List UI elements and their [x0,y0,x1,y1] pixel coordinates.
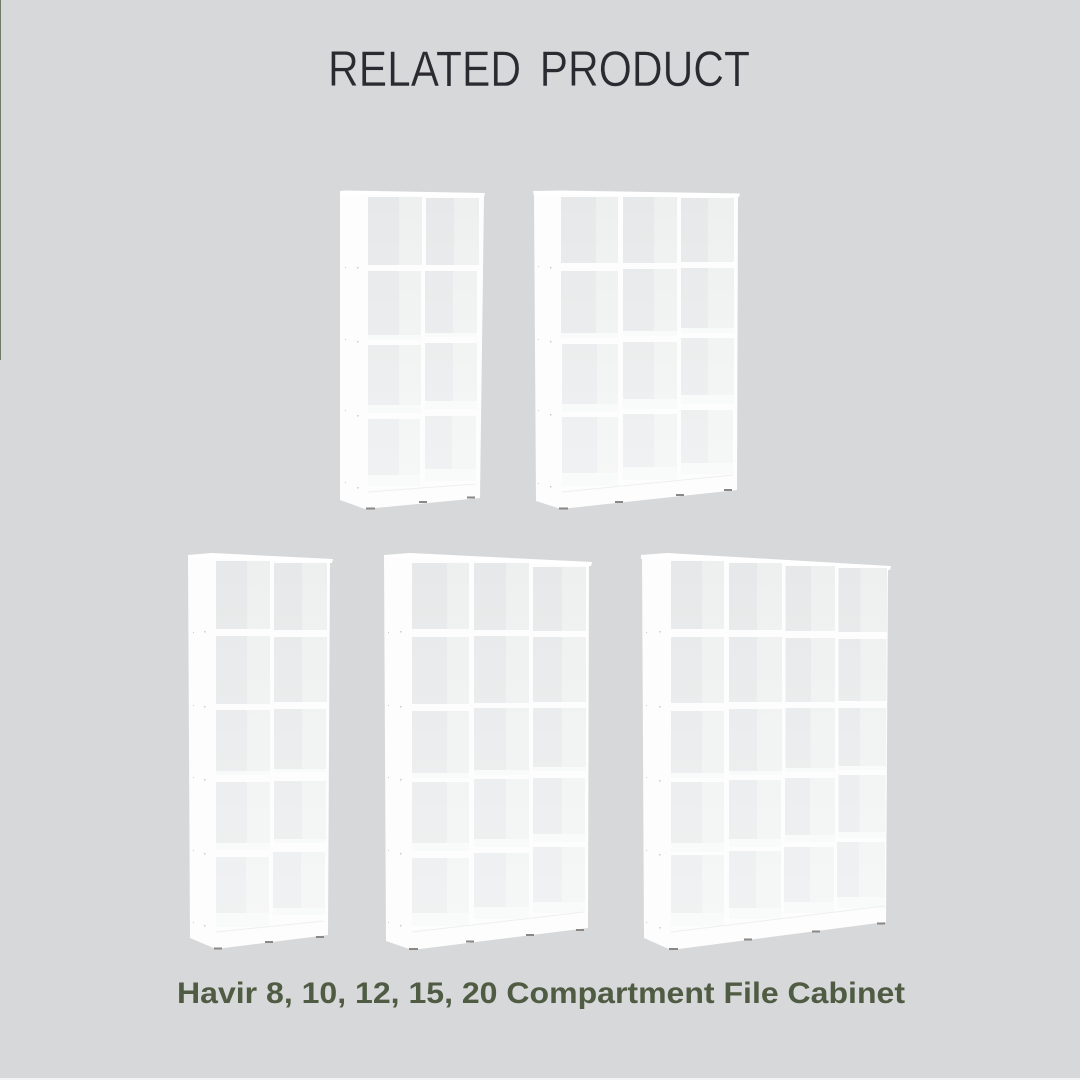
compartments [671,561,887,926]
compartments [561,197,734,486]
assembly holes [345,267,358,488]
plinth line [412,912,584,932]
plinth line [368,484,476,492]
cabinet: 8 compartment [340,190,485,510]
top panel [533,190,740,197]
feet [669,922,885,950]
assembly holes [646,631,660,928]
compartments [216,561,327,927]
cabinet frame [642,556,888,950]
cabinet frame [534,193,738,509]
top panel [340,190,485,197]
assembly holes [388,631,402,926]
cabinet frame [188,556,330,949]
cabinet: 12 compartment [533,190,740,510]
title: RELATED PRODUCT [328,41,750,97]
plinth line [216,921,324,932]
cabinet: 20 compartment [641,553,891,950]
compartments [368,197,479,486]
assembly holes [193,631,206,926]
compartments [412,563,586,926]
cabinet: 15 compartment [384,553,592,950]
top panel [641,553,891,570]
top panel [188,553,333,563]
feet [559,489,732,510]
caption: Havir 8, 10, 12, 15, 20 Compartment File Cabinet [177,977,905,1010]
plinth line [562,475,733,492]
plinth line [671,906,885,932]
cabinet: 10 compartment [188,553,333,950]
feet [409,929,584,950]
assembly holes [538,266,552,488]
top panel [384,553,592,566]
cabinet frame [384,556,589,950]
feet [366,496,475,510]
feet [214,936,324,950]
cabinet frame [340,193,484,509]
